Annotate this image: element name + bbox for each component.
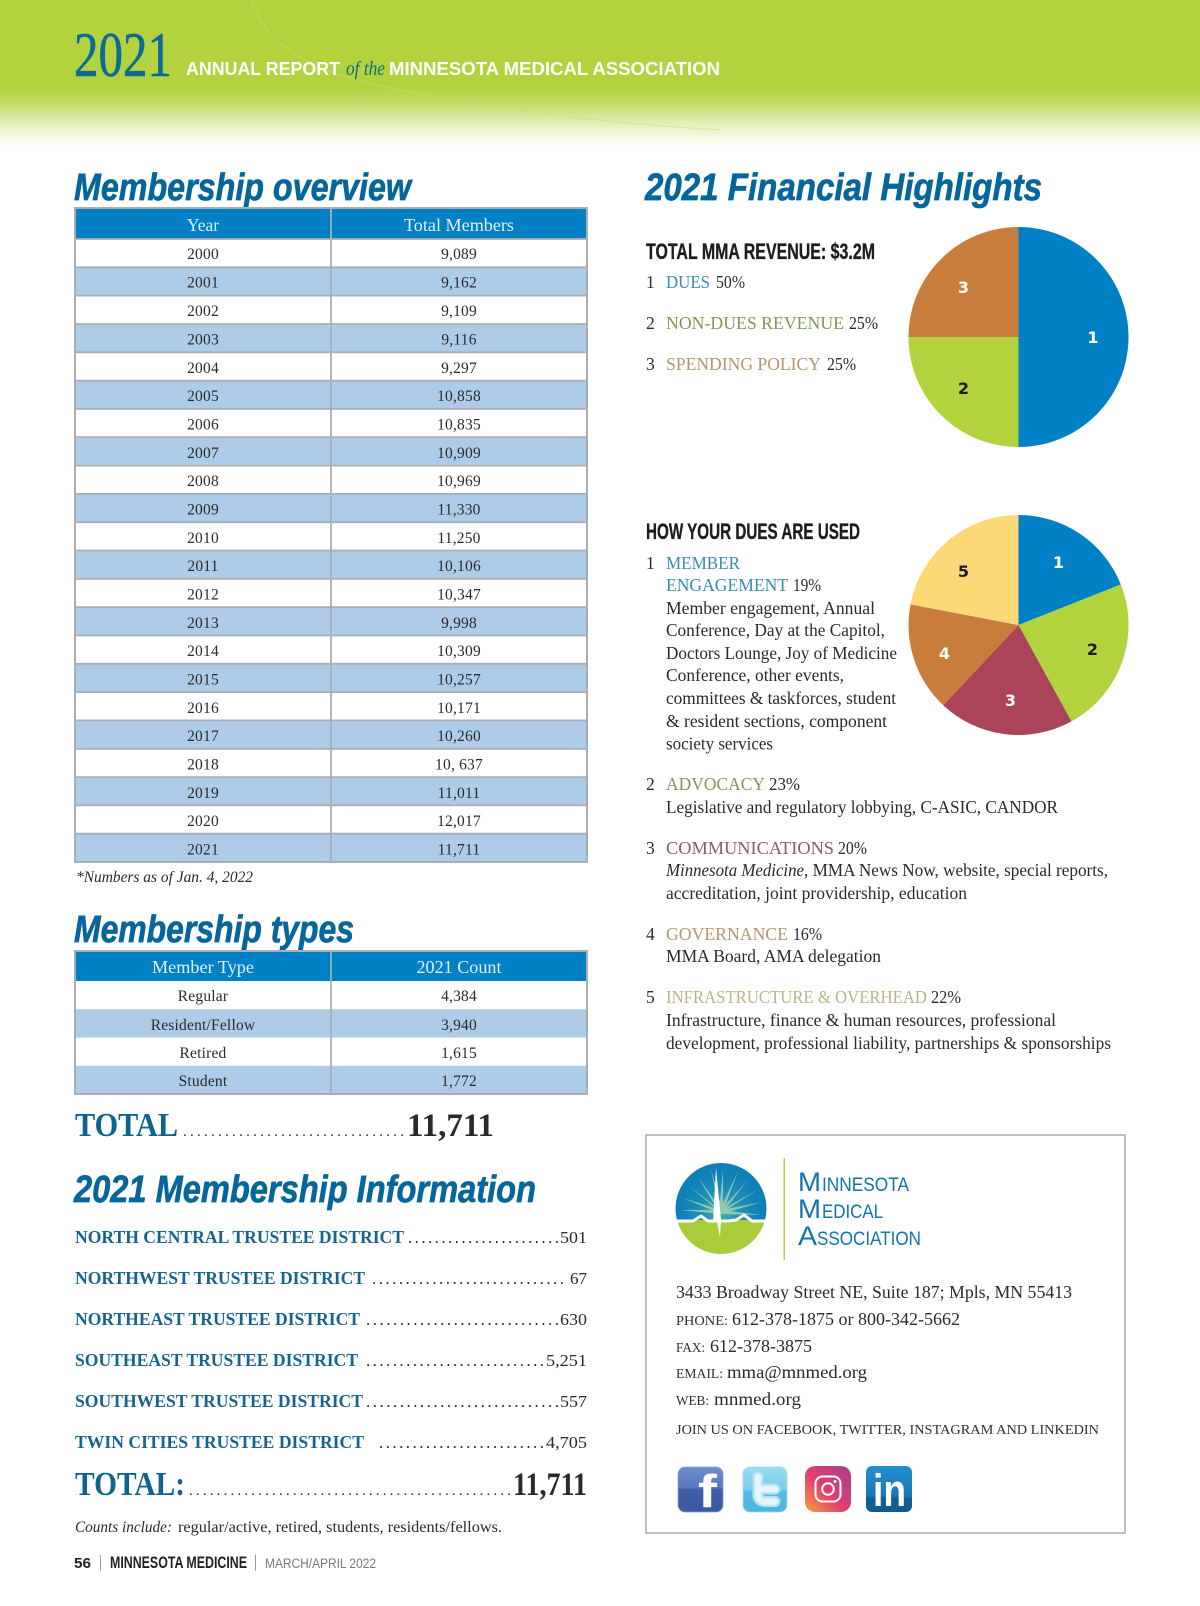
table: membership overview: 2017: [187, 728, 219, 745]
revenue legend: DUES: [666, 272, 710, 292]
ecg spike: [713, 1168, 721, 1237]
table: membership overview: 11,011: [438, 785, 480, 802]
page footer: MARCH/APRIL 2022: [265, 1556, 376, 1571]
dues item 1: Conference, Day at the Capitol,: [666, 620, 885, 640]
total: districts: TOTAL:: [75, 1466, 185, 1503]
revenue legend: 2: [646, 313, 655, 333]
dues item 3: [646, 838, 1108, 903]
dues item 3: 3: [646, 838, 655, 858]
table: membership overview: 12,017: [437, 813, 481, 830]
logo wordmark: INNESOTA: [822, 1175, 909, 1196]
table: membership types: 1,772: [441, 1073, 477, 1090]
table: membership overview: 9,116: [441, 332, 477, 348]
revenue legend: SPENDING POLICY: [666, 354, 821, 374]
dues item 1: Doctors Lounge, Joy of Medicine: [666, 643, 897, 663]
dues item 3: Minnesota Medicine: [665, 860, 804, 880]
dues item 2: 23%: [769, 774, 800, 794]
pie chart: revenue: 3: [958, 278, 969, 297]
district list: 501: [560, 1228, 587, 1247]
dues item 2: [646, 774, 1058, 817]
table: membership overview: 2008: [187, 473, 219, 490]
table: membership overview: 2020: [187, 813, 219, 830]
district list: 630: [560, 1310, 587, 1329]
district list: .............................: [372, 1269, 564, 1288]
table: membership overview: 10,260: [437, 728, 481, 745]
table: membership types: Student: [179, 1073, 228, 1090]
dues item 5: [646, 987, 1111, 1053]
table: membership overview: 11,330: [437, 502, 481, 518]
contact details: 612-378-1875 or 800-342-5662: [732, 1309, 960, 1329]
report title: [186, 58, 720, 80]
dues item 5: Infrastructure, finance & human resources, professional: [666, 1010, 1056, 1030]
table: membership overview: 10, 637: [435, 756, 483, 774]
pie chart: dues: 3: [1005, 691, 1016, 710]
revenue legend: 1: [646, 272, 655, 292]
table: membership types: 3,940: [441, 1017, 477, 1034]
table: membership overview: 2016: [187, 700, 219, 717]
table: membership overview: 2001: [187, 274, 219, 292]
total: membership types: [75, 1107, 494, 1144]
dues item 1: committees & taskforces, student: [666, 688, 896, 708]
heading: dues usage: HOW YOUR DUES ARE USED: [646, 519, 860, 544]
total: districts: 11,711: [513, 1467, 587, 1503]
dues item 2: 2: [646, 774, 655, 794]
logo wordmark: [798, 1167, 921, 1251]
logo wordmark: A: [798, 1221, 817, 1251]
revenue legend: NON-DUES REVENUE: [666, 313, 844, 333]
contact panel: [646, 1135, 1125, 1533]
contact details: [676, 1282, 1099, 1437]
heading: membership information: 2021 Membership Information: [73, 1169, 536, 1211]
table: membership types: 2021 Count: [416, 957, 502, 977]
counts note: regular/active, retired, students, residents/fellows.: [178, 1519, 502, 1536]
table: membership overview: 10,909: [437, 445, 481, 462]
table: membership overview: 2005: [187, 388, 219, 405]
pie chart: revenue: [908, 227, 1128, 447]
icon: facebook: [678, 1465, 723, 1517]
table: membership overview: 2003: [187, 332, 219, 348]
pie chart: dues: [909, 515, 1129, 735]
table: membership overview: Year: [187, 215, 219, 235]
dues item 2: Legislative and regulatory lobbying, C-ASIC, CANDOR: [666, 797, 1058, 817]
table: membership types: Resident/Fellow: [151, 1017, 256, 1034]
dues item 3: 20%: [838, 838, 867, 858]
table: membership overview: 9,109: [441, 303, 477, 320]
district list: NORTHWEST TRUSTEE DISTRICT: [75, 1268, 365, 1288]
contact details: WEB:: [676, 1393, 709, 1408]
revenue legend: 25%: [827, 354, 856, 374]
dues item 4: [646, 924, 881, 966]
district list: .............................: [366, 1310, 559, 1329]
total: membership types: ................................: [183, 1124, 404, 1140]
district list: ...........................: [366, 1351, 544, 1370]
table: membership overview: [75, 208, 587, 862]
dues item 1: ENGAGEMENT: [666, 575, 788, 595]
district list: 4,705: [546, 1433, 587, 1452]
district list: .............................: [366, 1392, 559, 1411]
icon: MMA logo mark: [675, 1163, 767, 1256]
page footer: [74, 1554, 376, 1572]
total: membership types: 11,711: [407, 1108, 494, 1144]
dues item 1: 1: [646, 553, 655, 573]
contact details: EMAIL:: [676, 1366, 723, 1381]
district list: SOUTHEAST TRUSTEE DISTRICT: [75, 1350, 358, 1370]
table: membership overview: 2012: [187, 586, 219, 604]
pie chart: revenue: 1: [1087, 328, 1099, 347]
revenue legend: 25%: [849, 313, 878, 333]
pie chart: dues: 5: [958, 562, 969, 581]
dues item 2: ADVOCACY: [666, 774, 765, 794]
table: membership overview: 11,250: [437, 530, 481, 547]
table: membership overview: 9,162: [441, 274, 477, 292]
table: membership overview: 2009: [187, 502, 219, 518]
table: membership overview: 10,347: [437, 586, 481, 604]
table: membership types: Regular: [178, 988, 229, 1005]
contact details: 612-378-3875: [710, 1336, 812, 1356]
table: membership types: Retired: [179, 1045, 227, 1062]
heading: membership types: Membership types: [74, 909, 354, 951]
district list: SOUTHWEST TRUSTEE DISTRICT: [75, 1391, 363, 1411]
table: membership overview: 9,998: [441, 615, 477, 632]
contact details: mma@mnmed.org: [727, 1362, 867, 1382]
dues item 5: 5: [646, 987, 655, 1007]
dues item 1: 19%: [793, 575, 821, 595]
logo wordmark: SSOCIATION: [817, 1229, 921, 1250]
table: membership overview: 10,835: [437, 416, 481, 434]
table: membership overview: 2018: [187, 756, 219, 774]
pie chart: dues: 1: [1053, 553, 1064, 572]
pie chart: revenue: 2: [958, 379, 969, 398]
table: membership types: 4,384: [441, 988, 477, 1005]
footnote: *Numbers as of Jan. 4, 2022: [76, 869, 253, 886]
heading: total revenue: TOTAL MMA REVENUE: $3.2M: [646, 239, 875, 264]
icon: instagram: [805, 1466, 851, 1512]
table: membership overview: 10,106: [437, 558, 481, 575]
table: membership overview: 2021: [187, 842, 219, 858]
logo wordmark: M: [798, 1167, 821, 1197]
counts note: Counts include:: [75, 1519, 172, 1536]
table: membership overview: 2004: [187, 360, 219, 377]
table: membership types: [75, 951, 587, 1094]
page footer: 56: [74, 1555, 91, 1572]
table: membership overview: 2015: [187, 672, 219, 688]
table: membership overview: 2019: [187, 785, 219, 802]
table: membership overview: 2013: [187, 615, 219, 632]
revenue legend: [646, 272, 878, 374]
dues item 1: Conference, other events,: [666, 665, 844, 685]
report title: of the: [346, 58, 385, 80]
district list: 557: [560, 1392, 588, 1411]
district list: TWIN CITIES TRUSTEE DISTRICT: [75, 1432, 364, 1452]
revenue legend: 50%: [716, 272, 745, 292]
district list: 67: [570, 1269, 588, 1288]
table: membership types: Member Type: [152, 957, 254, 977]
dues item 5: 22%: [931, 987, 961, 1007]
dues item 1: MEMBER: [666, 553, 740, 573]
table: membership overview: 9,089: [441, 246, 477, 263]
year: 2021: [74, 19, 172, 90]
report title: MINNESOTA MEDICAL ASSOCIATION: [389, 59, 720, 79]
logo wordmark: EDICAL: [822, 1202, 883, 1223]
table: membership overview: 10,309: [437, 643, 481, 660]
table: membership overview: 2007: [187, 445, 219, 462]
dues item 4: MMA Board, AMA delegation: [666, 946, 881, 966]
table: membership types: 1,615: [441, 1045, 477, 1062]
pie chart: dues: 4: [939, 644, 950, 663]
logo divider: [784, 1158, 785, 1260]
table: membership overview: Total Members: [404, 215, 514, 235]
table: membership overview: 9,297: [441, 360, 477, 377]
dues item 5: INFRASTRUCTURE & OVERHEAD: [666, 987, 927, 1007]
table: membership overview: 11,711: [438, 842, 480, 858]
dues item 4: GOVERNANCE: [666, 924, 788, 944]
dues item 4: 4: [646, 924, 655, 944]
table: membership overview: 2000: [187, 246, 219, 263]
icon: linkedin: in: [873, 1465, 906, 1516]
dues item 1: society services: [666, 734, 773, 754]
table: membership overview: 2010: [187, 530, 219, 547]
dues item 1: & resident sections, component: [666, 711, 887, 731]
total: districts: [75, 1466, 587, 1503]
contact details: FAX:: [676, 1340, 705, 1355]
total: districts: ...............................................: [189, 1483, 511, 1499]
dues item 1: [646, 553, 897, 754]
revenue legend: 3: [646, 354, 655, 374]
table: membership overview: 2002: [187, 303, 219, 320]
icon: facebook: f: [698, 1465, 718, 1517]
total: membership types: TOTAL: [75, 1107, 178, 1144]
table: membership overview: 10,257: [437, 672, 481, 688]
district list: NORTHEAST TRUSTEE DISTRICT: [75, 1309, 360, 1329]
contact details: JOIN US ON FACEBOOK, TWITTER, INSTAGRAM AND LINKEDIN: [676, 1422, 1099, 1437]
dues item 3: accreditation, joint providership, education: [666, 883, 967, 903]
district list: NORTH CENTRAL TRUSTEE DISTRICT: [75, 1227, 404, 1247]
table: membership overview: 10,858: [437, 388, 481, 405]
district list: .......................: [408, 1228, 559, 1247]
dues item 4: 16%: [793, 924, 822, 944]
contact details: mnmed.org: [714, 1389, 801, 1409]
dues item 1: Member engagement, Annual: [666, 598, 875, 618]
table: membership overview: 10,969: [437, 473, 481, 490]
district list: [75, 1227, 588, 1452]
header band: [0, 0, 1200, 146]
table: membership overview: 2011: [187, 558, 219, 575]
dues item 5: development, professional liability, partnerships & sponsorships: [666, 1033, 1111, 1053]
contact details: PHONE:: [676, 1313, 728, 1328]
dues item 3: COMMUNICATIONS: [666, 838, 834, 858]
heading: membership overview: Membership overview: [74, 167, 413, 209]
table: membership overview: 2006: [187, 416, 219, 434]
table: membership overview: 10,171: [437, 700, 481, 717]
pie chart: dues: 2: [1087, 640, 1098, 659]
table: membership overview: 2014: [187, 643, 219, 660]
heading: financial highlights: 2021 Financial Highlights: [644, 167, 1042, 209]
icon: twitter: [743, 1467, 787, 1512]
dues item 3: , MMA News Now, website, special reports,: [804, 860, 1108, 880]
contact details: 3433 Broadway Street NE, Suite 187; Mpls, MN 55413: [676, 1282, 1072, 1302]
district list: 5,251: [546, 1351, 587, 1370]
district list: .........................: [379, 1433, 544, 1452]
page footer: MINNESOTA MEDICINE: [110, 1554, 247, 1572]
report title: ANNUAL REPORT: [186, 59, 340, 79]
logo wordmark: M: [798, 1194, 821, 1224]
